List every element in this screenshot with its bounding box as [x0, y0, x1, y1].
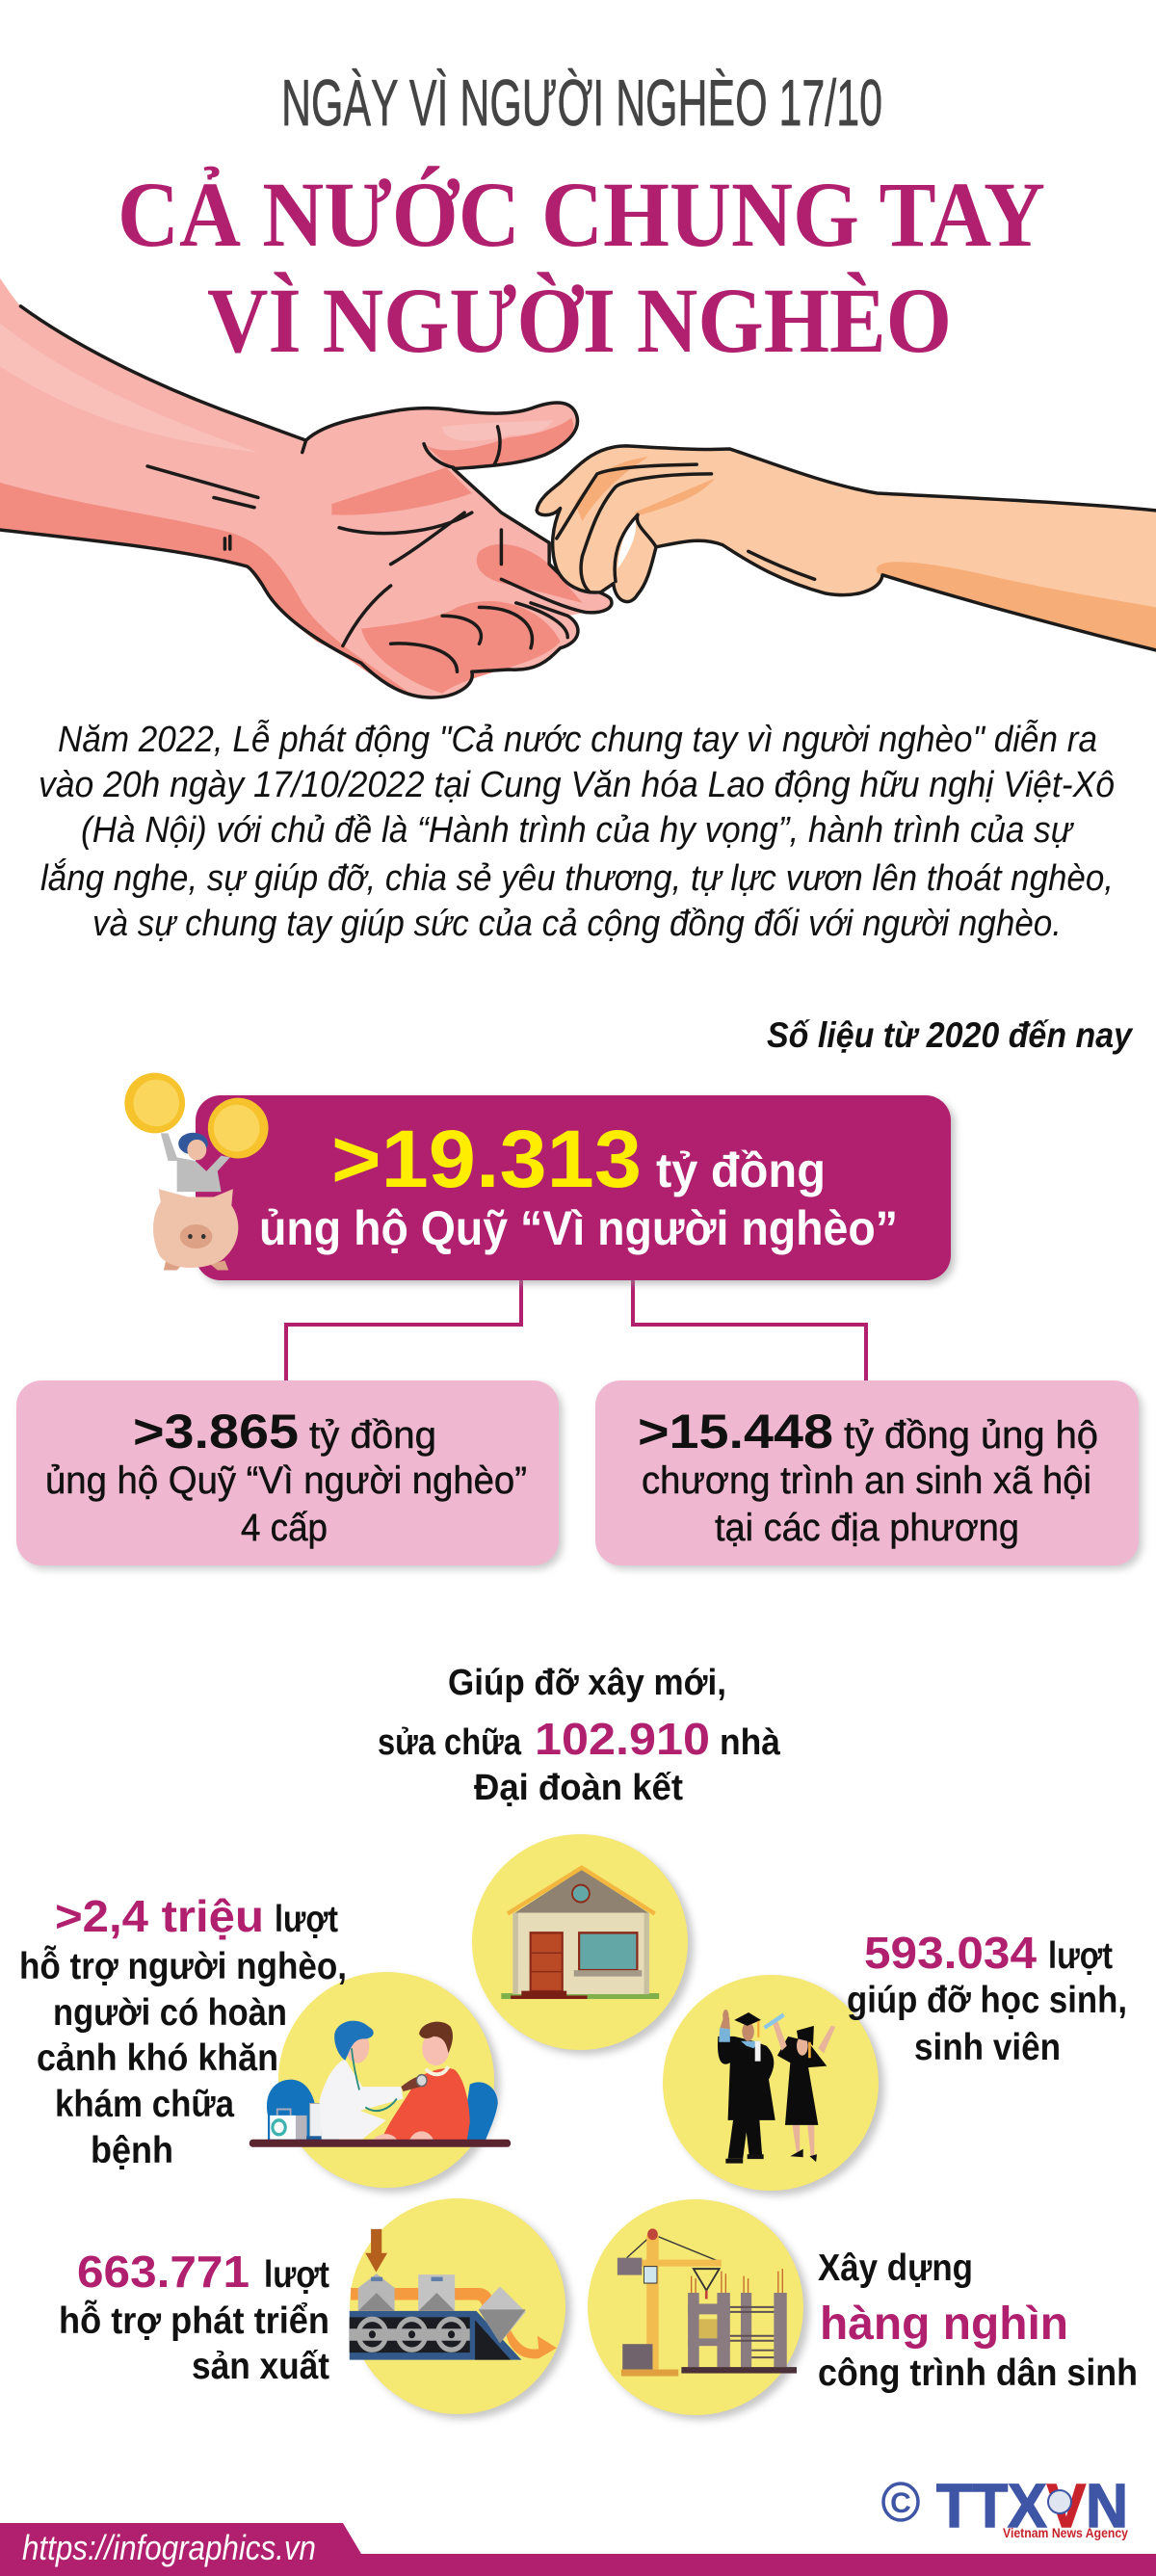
illustration: two hands	[0, 278, 1156, 697]
text: housing: sửa chữa	[378, 1722, 522, 1763]
unit: tỷ đồng	[656, 1143, 826, 1197]
text: housing: nhà	[720, 1722, 781, 1763]
icon: piggy bank with coins	[124, 1073, 269, 1271]
intro paragraph: và sự chung tay giúp sức của cả cộng đồng đối với người nghèo.	[92, 904, 1062, 944]
callout: production: hỗ trợ phát triển	[59, 2300, 329, 2342]
callout: production: sản xuất	[192, 2346, 329, 2387]
callout: public works	[818, 2247, 1138, 2394]
callout: medical support: khám chữa	[55, 2084, 234, 2125]
copyright symbol: C	[890, 2487, 911, 2519]
title: VÌ NGƯỜI NGHÈO	[207, 269, 952, 372]
wordmark: TTXVN	[936, 2471, 1128, 2540]
circle: graduates	[663, 1975, 884, 2195]
callout: medical support: lượt	[275, 1899, 338, 1940]
text: housing: 102.910	[535, 1714, 710, 1764]
amount: >3.865	[133, 1405, 299, 1459]
agency globe	[1048, 2490, 1071, 2513]
circle: conveyor	[350, 2198, 571, 2419]
callout: production: lượt	[264, 2254, 329, 2296]
callout: public works: hàng nghìn	[820, 2299, 1068, 2350]
unit: tỷ đồng	[309, 1414, 436, 1457]
callout: medical support: >2,4 triệu	[55, 1891, 264, 1941]
circle: house	[472, 1834, 694, 2055]
callout: students: sinh viên	[914, 2027, 1061, 2068]
title	[118, 163, 1045, 372]
callout: production	[59, 2247, 329, 2387]
data period note: Số liệu từ 2020 đến nay	[767, 1015, 1134, 1055]
callout: public works: Xây dựng	[818, 2247, 973, 2289]
text: housing	[378, 1663, 781, 1808]
left hand	[0, 278, 612, 697]
total amount: >19.313	[331, 1114, 642, 1204]
agency name: Vietnam News Agency	[1003, 2525, 1128, 2540]
footer band	[0, 2523, 1156, 2576]
website url: https://infographics.vn	[22, 2528, 316, 2567]
right hand	[537, 446, 1156, 650]
intro paragraph	[39, 718, 1115, 944]
callout: medical support: người có hoàn	[53, 1992, 287, 2034]
panel: total fund	[196, 1095, 955, 1284]
description: ủng hộ Quỹ “Vì người nghèo”	[45, 1459, 527, 1502]
title: CẢ NƯỚC CHUNG TAY	[118, 163, 1045, 266]
circle: doctor	[250, 1972, 511, 2193]
description: tại các địa phương	[715, 1507, 1019, 1549]
text: housing: Giúp đỡ xây mới,	[448, 1663, 726, 1703]
copyright symbol	[883, 2484, 918, 2520]
description: tỷ đồng ủng hộ	[844, 1414, 1098, 1457]
callout: medical support: hỗ trợ người nghèo,	[19, 1945, 347, 1987]
callout: medical support: bệnh	[91, 2130, 173, 2171]
description	[45, 1459, 527, 1549]
callout: medical support	[19, 1891, 347, 2171]
callout: production: 663.771	[77, 2247, 250, 2297]
description: 4 cấp	[241, 1507, 328, 1549]
panel: 4-level fund	[16, 1380, 563, 1569]
text: housing: Đại đoàn kết	[474, 1768, 683, 1808]
connector lines	[286, 1280, 866, 1380]
intro paragraph: Năm 2022, Lễ phát động "Cả nước chung tay vì người nghèo" diễn ra	[58, 718, 1097, 760]
amount: >15.448	[638, 1405, 833, 1459]
callout: public works: công trình dân sinh	[818, 2353, 1138, 2394]
panel: social security	[595, 1380, 1143, 1569]
callout: students: 593.034	[864, 1928, 1037, 1978]
callout: students: giúp đỡ học sinh,	[847, 1980, 1127, 2021]
description: chương trình an sinh xã hội	[642, 1459, 1091, 1502]
callout: medical support: cảnh khó khăn	[37, 2037, 278, 2079]
intro paragraph: (Hà Nội) với chủ đề là “Hành trình của hy vọng”, hành trình của sự	[81, 810, 1075, 851]
callout: students	[847, 1928, 1127, 2068]
description: ủng hộ Quỹ “Vì người nghèo”	[259, 1201, 898, 1255]
description	[642, 1414, 1098, 1549]
circle: construction	[588, 2199, 809, 2420]
callout: students: lượt	[1048, 1935, 1113, 1977]
logo: TTXVN	[883, 2471, 1128, 2540]
